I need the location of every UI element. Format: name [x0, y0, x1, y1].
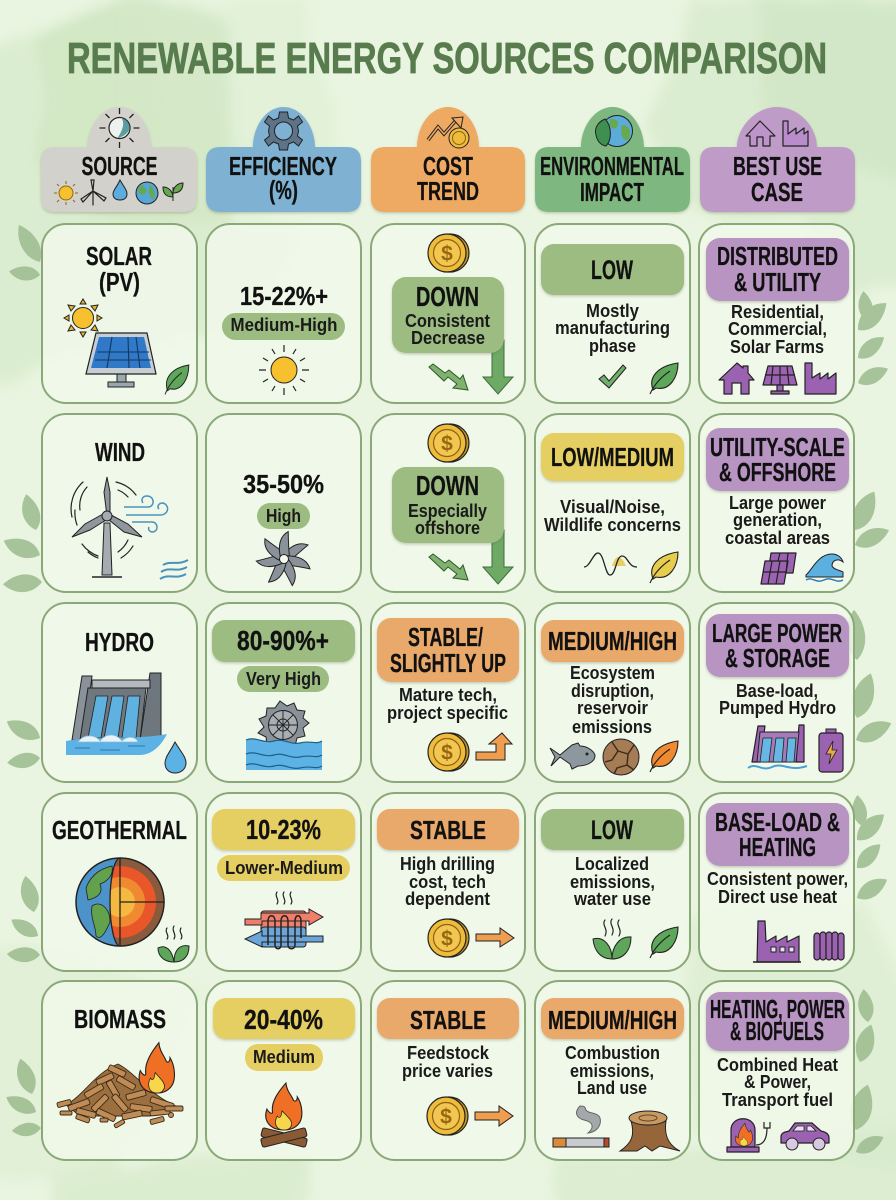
decorative leaf sprig: left row 1	[8, 221, 45, 285]
icon: dam	[66, 673, 167, 755]
decorative leaf sprig: left row 2	[1, 494, 43, 596]
header: efficiency	[206, 107, 361, 212]
rating box: MEDIUM/HIGH	[548, 1005, 677, 1035]
icon: flame	[139, 1043, 174, 1093]
description: Mostly	[586, 301, 639, 321]
description: Combined Heat	[717, 1055, 838, 1075]
icon: factory	[805, 363, 836, 394]
card: wind efficiency	[206, 414, 361, 592]
card: wind best use	[699, 414, 854, 592]
description	[402, 1043, 493, 1081]
card: hydro best use	[699, 603, 854, 782]
icon: coin: $	[440, 1106, 452, 1128]
name: HYDRO	[85, 627, 154, 657]
description	[707, 869, 848, 907]
card: wind environment	[535, 414, 690, 592]
card: geothermal cost	[371, 793, 525, 971]
icon: step-up arrow	[476, 733, 512, 760]
value: 35-50%	[243, 469, 324, 499]
description: Mature tech,	[399, 685, 497, 705]
description: phase	[589, 336, 636, 356]
name: SOLAR	[86, 241, 152, 271]
description	[387, 685, 508, 723]
value: 15-22%+	[240, 281, 328, 311]
card: wind cost	[371, 414, 525, 592]
description: Feedstock	[407, 1043, 490, 1063]
use box	[706, 428, 849, 491]
status box	[377, 618, 519, 682]
header: cost trend	[371, 107, 525, 212]
heading text: ENVIRONMENTAL	[540, 151, 684, 181]
icon: leaf	[650, 363, 678, 394]
rating pill	[237, 666, 329, 692]
header: best use case	[700, 107, 855, 212]
description: Combustion	[565, 1043, 660, 1063]
card: biomass source	[42, 981, 197, 1160]
description: Visual/Noise,	[560, 497, 665, 517]
icon: coin: $	[441, 928, 453, 950]
icon: zigzag arrow	[429, 554, 468, 580]
icon: coin: $	[441, 242, 453, 266]
heading text: COST	[423, 151, 473, 181]
decorative leaf sprig: right row 3	[842, 609, 894, 745]
icon: battery	[819, 729, 843, 772]
name line 2: (PV)	[99, 267, 140, 297]
status box	[392, 467, 504, 543]
card: solar cost	[371, 224, 525, 403]
rating box	[541, 433, 684, 481]
icon: dam	[748, 725, 807, 768]
use box: & BIOFUELS	[730, 1016, 824, 1046]
card: hydro environment	[535, 603, 690, 782]
description: manufacturing	[555, 318, 670, 338]
icon: cracked earth	[603, 739, 639, 775]
description: Direct use heat	[718, 887, 837, 907]
icon: check	[599, 365, 626, 388]
icon: water waves	[160, 560, 188, 579]
use box	[706, 614, 849, 677]
icon: sun	[259, 345, 309, 395]
heading text line 2: (%)	[269, 175, 298, 205]
card: solar best use	[699, 224, 854, 403]
description	[719, 681, 836, 718]
description	[570, 663, 655, 737]
rating pill	[222, 313, 345, 340]
icon: fish	[550, 743, 595, 769]
description: emissions,	[570, 872, 655, 892]
description	[555, 301, 670, 356]
status box: DOWN	[416, 470, 479, 501]
rating box	[541, 998, 684, 1039]
status box	[377, 998, 519, 1039]
icon: heat exchanger	[245, 892, 323, 949]
description	[544, 497, 681, 535]
description	[725, 493, 830, 548]
status box: SLIGHTLY UP	[390, 648, 506, 678]
heading text: BEST USE	[733, 151, 822, 181]
description: water use	[573, 889, 651, 909]
status box: Especially	[408, 501, 487, 521]
description	[717, 1055, 838, 1110]
heading text line 2: CASE	[751, 177, 803, 207]
rating box	[541, 809, 684, 850]
icon: sound wave	[584, 553, 637, 575]
icon: radiator	[814, 932, 844, 960]
header: source	[41, 107, 197, 212]
rating pill: Very High	[246, 669, 321, 689]
icon: biomass heater	[727, 1119, 770, 1152]
use box: DISTRIBUTED	[717, 241, 838, 271]
description: Residential,	[731, 302, 824, 322]
heading text line 2: IMPACT	[580, 177, 644, 207]
icon: gear	[264, 112, 302, 150]
description	[400, 854, 495, 909]
card: solar efficiency	[206, 224, 361, 403]
icon: right arrow	[476, 928, 514, 947]
card: biomass cost	[371, 981, 525, 1160]
value box: 20-40%	[244, 1004, 323, 1035]
icon: sun	[64, 299, 102, 337]
name: GEOTHERMAL	[52, 815, 187, 845]
description	[565, 1043, 660, 1098]
decorative leaf sprig: right row 1	[851, 291, 893, 387]
rating box	[541, 620, 684, 662]
icon: leaf	[165, 365, 189, 394]
card: solar environment	[535, 224, 690, 403]
icon: rising chart with coin	[428, 117, 469, 148]
card: biomass environment	[535, 981, 690, 1160]
use box: & OFFSHORE	[719, 457, 836, 487]
icon: wind lines	[124, 496, 168, 532]
decorative leaf sprig: left row 4	[6, 876, 41, 966]
icon: wood chip pile	[57, 1064, 183, 1128]
rating box: MEDIUM/HIGH	[548, 626, 677, 656]
decorative leaf sprig: right row 4	[850, 795, 891, 902]
icon: leaf	[650, 552, 678, 583]
use box	[706, 803, 849, 866]
description: Solar Farms	[730, 337, 824, 357]
icon: coin: $	[441, 432, 453, 456]
rating pill: Medium	[253, 1047, 315, 1067]
status box: offshore	[415, 518, 480, 538]
card: biomass best use	[699, 981, 854, 1160]
description: Wildlife concerns	[544, 515, 681, 535]
description: Ecosystem	[570, 663, 655, 683]
icon: car	[781, 1123, 829, 1150]
icon: solar panel	[86, 333, 156, 387]
heading text: EFFICIENCY	[229, 151, 337, 181]
icon: coin	[428, 424, 469, 462]
icon: leaf	[650, 927, 678, 958]
value box	[212, 809, 355, 850]
name: BIOMASS	[74, 1004, 166, 1034]
description: generation,	[733, 510, 822, 530]
description: Localized	[575, 854, 649, 874]
rating box: LOW	[591, 255, 633, 285]
icon: water drop	[165, 742, 186, 773]
description: emissions	[572, 717, 652, 737]
icon: campfire	[260, 1083, 308, 1147]
rating box: LOW	[591, 815, 633, 845]
icon: coin	[428, 733, 469, 771]
card: biomass efficiency	[206, 981, 361, 1160]
icon: house	[719, 363, 754, 394]
icon: coin: $	[441, 742, 453, 764]
icon: wave	[806, 554, 843, 581]
description	[570, 854, 655, 909]
use box: & UTILITY	[734, 267, 821, 297]
use box	[706, 238, 849, 301]
description: disruption,	[571, 681, 654, 701]
icons: house and factory	[746, 121, 808, 146]
description: reservoir	[577, 698, 648, 718]
heading text line 2: TREND	[417, 176, 479, 206]
icon: right arrow	[475, 1106, 513, 1126]
card: solar source	[42, 224, 197, 403]
card: hydro source	[42, 603, 197, 782]
icon: globe with leaf	[595, 116, 632, 146]
decorative leaf sprig: left row 3	[4, 711, 43, 770]
status box: Consistent	[405, 311, 490, 331]
decorative leaf sprig: right row 2	[843, 488, 891, 550]
status box	[377, 809, 519, 850]
value box: 80-90%+	[237, 625, 329, 656]
icon: leaf	[650, 741, 678, 772]
description: cost, tech	[409, 872, 486, 892]
icon: coin	[427, 1097, 468, 1135]
description: Consistent power,	[707, 869, 848, 889]
description: project specific	[387, 703, 508, 723]
card: geothermal efficiency	[206, 793, 361, 971]
icon: cigarette with smoke	[553, 1106, 609, 1147]
description: emissions,	[570, 1061, 654, 1081]
icon: solar panel	[763, 366, 797, 394]
icon: solar array	[761, 553, 796, 584]
rating box	[541, 244, 684, 295]
description: Large power	[729, 493, 826, 513]
decorative leaf sprig: right row 5	[841, 989, 886, 1156]
description: Transport fuel	[722, 1090, 833, 1110]
description: Commercial,	[728, 319, 827, 339]
rating pill: High	[266, 506, 301, 526]
status box: STABLE	[410, 815, 486, 845]
status box: Decrease	[411, 328, 485, 348]
name: WIND	[95, 437, 145, 467]
icon: earth cross-section	[76, 855, 170, 950]
status box: DOWN	[416, 281, 479, 312]
icon row: five sources	[54, 180, 183, 205]
use box: HEATING	[739, 832, 816, 862]
status box: STABLE/	[408, 622, 483, 652]
value box	[212, 620, 355, 662]
icon: steam and sprout	[593, 919, 631, 959]
icon: sun earth	[100, 108, 140, 148]
description: & Power,	[744, 1072, 811, 1092]
description: Pumped Hydro	[719, 698, 836, 718]
rating pill	[257, 503, 310, 529]
icon: coin	[428, 919, 469, 957]
description	[728, 302, 827, 357]
status box	[392, 277, 504, 353]
use box	[706, 992, 849, 1051]
use box: & STORAGE	[725, 643, 830, 673]
rating pill: Lower-Medium	[225, 858, 343, 878]
decorative leaf sprig: left row 5	[4, 1058, 42, 1138]
card: geothermal environment	[535, 793, 690, 971]
card: geothermal best use	[699, 793, 854, 971]
description: Land use	[577, 1078, 647, 1098]
rating pill: Medium-High	[230, 315, 338, 335]
description: Base-load,	[736, 681, 818, 701]
description: coastal areas	[725, 528, 830, 548]
icon: zigzag arrow	[429, 364, 468, 390]
card: geothermal source	[42, 793, 197, 971]
icon: turbine swirl	[256, 531, 311, 586]
icon: factory	[753, 921, 801, 962]
icon: tree stump	[620, 1111, 680, 1151]
rating box: LOW/MEDIUM	[551, 442, 674, 472]
description: dependent	[405, 889, 490, 909]
use box: BASE-LOAD &	[715, 807, 840, 837]
icon: big down arrow	[483, 340, 513, 394]
value box: 10-23%	[246, 814, 321, 845]
icon: big down arrow	[483, 530, 513, 584]
card: hydro efficiency	[206, 603, 361, 782]
value box	[213, 998, 355, 1039]
icon: wind turbine	[71, 477, 142, 577]
rating pill	[245, 1044, 323, 1071]
header: environmental impact	[535, 107, 690, 212]
status box: STABLE	[410, 1005, 486, 1035]
description: High drilling	[400, 854, 495, 874]
card: wind source	[42, 414, 197, 592]
heading text: SOURCE	[82, 151, 158, 181]
icon: steam and sprout	[158, 926, 189, 962]
description: price varies	[402, 1061, 493, 1081]
card: hydro cost	[371, 603, 525, 782]
icon: coin	[428, 234, 469, 272]
icon: water wheel	[246, 701, 322, 770]
